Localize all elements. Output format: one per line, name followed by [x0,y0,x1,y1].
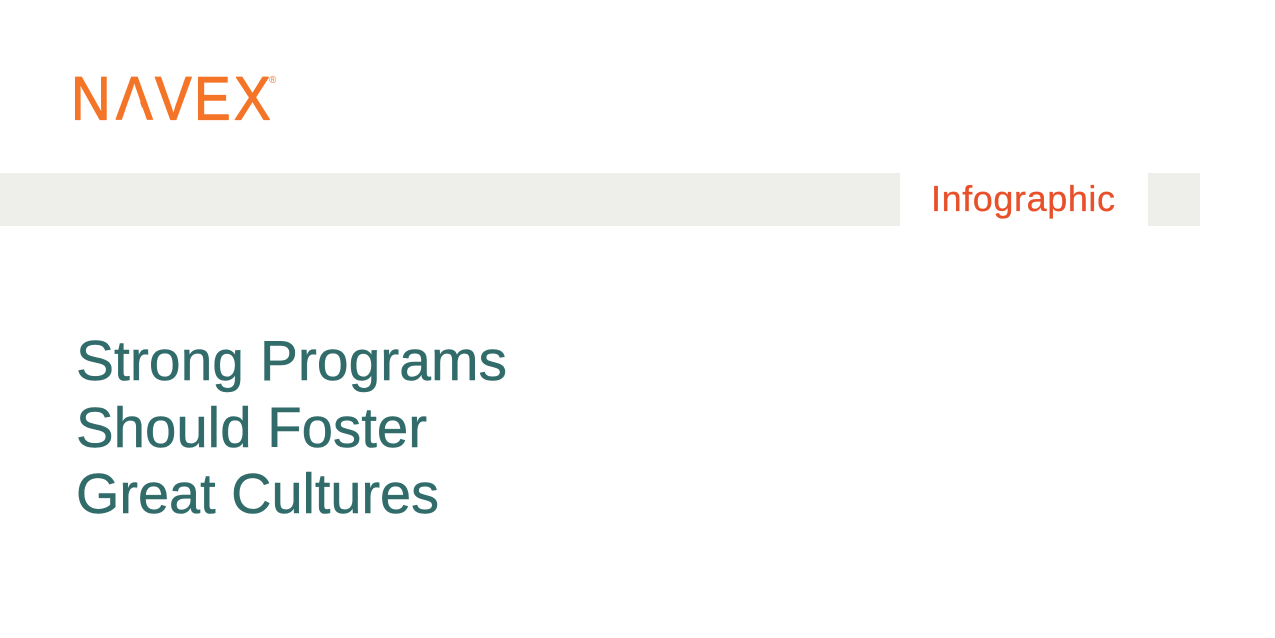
header band: right segment [1148,173,1200,226]
label: Infographic: Infographic [931,178,1115,219]
title: Great Cultures [76,462,439,526]
logo: NAVEX: ® [269,75,277,86]
title [76,329,507,526]
title: Strong Programs [76,329,507,393]
title: Should Foster [76,396,427,460]
header band: left segment [0,173,900,226]
logo: NAVEX: NAVEX [71,65,271,133]
